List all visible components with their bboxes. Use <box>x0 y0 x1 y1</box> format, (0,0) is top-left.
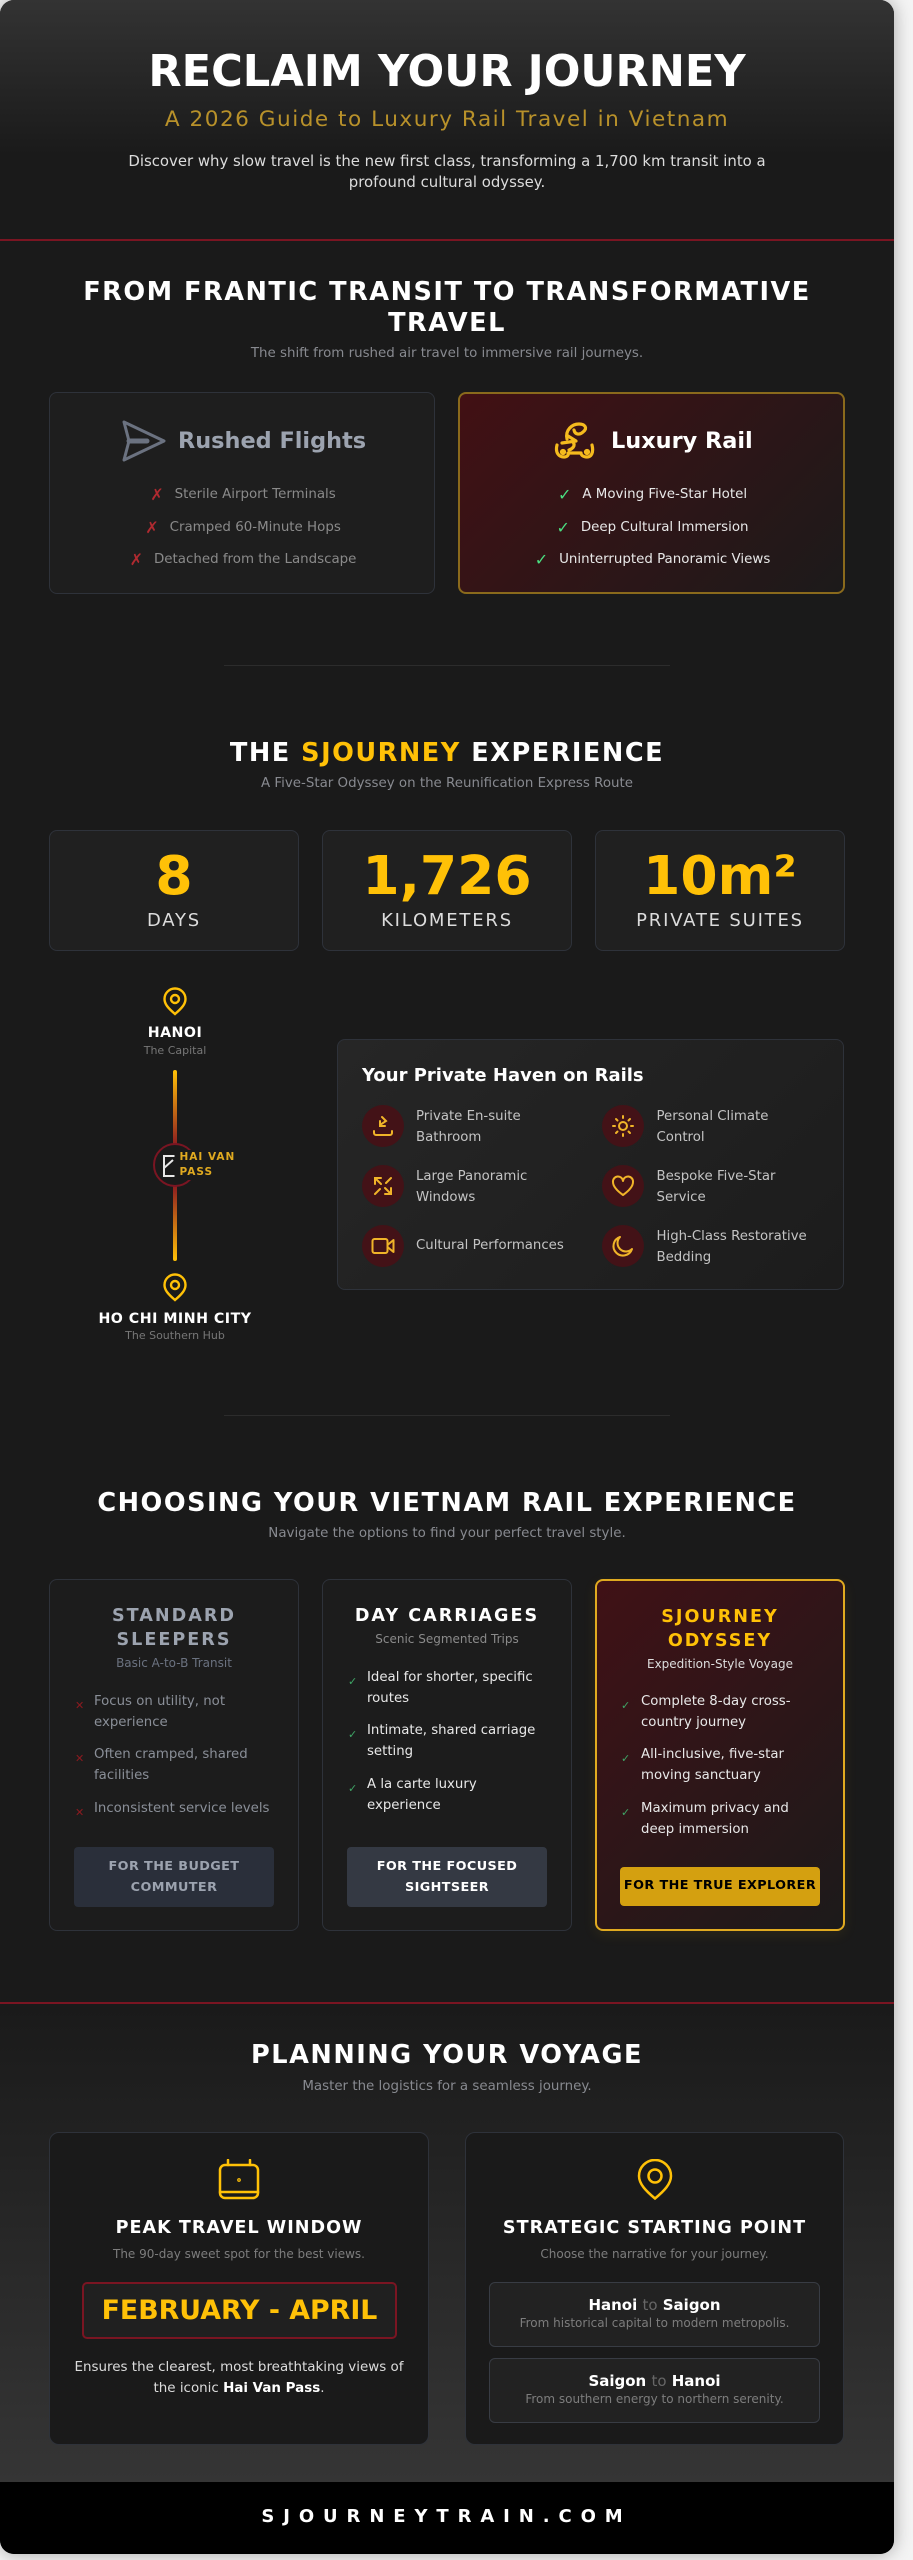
stat card: days <box>49 830 299 951</box>
list text: Ideal for shorter, specific <box>367 1670 533 1685</box>
list marker: ✓ <box>348 1782 357 1795</box>
list item <box>558 485 747 504</box>
amenity: bathroom <box>362 1105 521 1147</box>
stat card: kilometers <box>322 830 572 951</box>
list text <box>641 1694 791 1730</box>
amenity text <box>416 1169 527 1205</box>
list text: Focus on utility, not <box>94 1694 225 1709</box>
option title: STANDARD <box>112 1606 236 1626</box>
footer url: SJOURNEYTRAIN.COM <box>261 2506 632 2527</box>
icon: rail <box>554 422 594 459</box>
audience button <box>347 1847 547 1907</box>
list marker: ✕ <box>75 1752 84 1765</box>
list marker: ✕ <box>75 1806 84 1819</box>
sublabel: southern hub: The Southern Hub <box>125 1329 225 1342</box>
amenity text: Bedding <box>656 1250 711 1265</box>
amenity text: Cultural Performances <box>416 1238 564 1253</box>
card subtitle: Choose the narrative for your journey. <box>540 2247 769 2261</box>
route note: From southern energy to northern serenity. <box>525 2392 784 2406</box>
route title: Saigon to Hanoi <box>588 2372 721 2390</box>
amenity text: Bespoke Five-Star <box>656 1169 775 1184</box>
card title: STRATEGIC STARTING POINT <box>503 2218 806 2238</box>
amenity text: Windows <box>416 1190 475 1205</box>
sublabel: capital: The Capital <box>144 1044 206 1057</box>
route timeline <box>98 987 252 1342</box>
date range box: FEBRUARY - APRIL <box>102 2295 377 2326</box>
list text: Complete 8-day cross- <box>641 1694 791 1709</box>
list marker: ✕ <box>75 1699 84 1712</box>
subheading: choosing: Navigate the options to find your perfect travel style. <box>268 1526 626 1541</box>
description: the iconic Hai Van Pass. <box>154 2381 324 2396</box>
list item: Detached from the Landscape <box>154 552 356 567</box>
audience button: FOR THE FOCUSED <box>377 1859 517 1874</box>
list item: Cramped 60-Minute Hops <box>170 520 341 535</box>
list text: All-inclusive, five-star <box>641 1747 784 1762</box>
list text: country journey <box>641 1715 746 1730</box>
list item: A Moving Five-Star Hotel <box>582 487 747 502</box>
list item: ✓ <box>535 550 548 569</box>
description: Ensures the clearest, most breathtaking views of <box>75 2360 403 2375</box>
subheading: planning: Master the logistics for a seamless journey. <box>302 2079 592 2094</box>
route note: From historical capital to modern metropolis. <box>520 2316 789 2330</box>
route title: Hanoi to Saigon <box>588 2296 721 2314</box>
route option: saigon to hanoi <box>489 2358 820 2423</box>
subheading: experience: A Five-Star Odyssey on the Reunification Express Route <box>261 776 633 791</box>
audience button <box>74 1847 274 1907</box>
panel: private haven <box>337 1039 844 1290</box>
panel: peak travel window <box>49 2132 429 2445</box>
panel: rushed flights <box>49 392 435 594</box>
option subtitle: Expedition-Style Voyage <box>647 1657 793 1671</box>
amenity text: Control <box>656 1130 705 1145</box>
icon: plane <box>122 420 166 462</box>
number: 8 <box>155 844 193 907</box>
panel: day carriages <box>322 1579 572 1931</box>
list text <box>367 1670 533 1706</box>
list marker: ✓ <box>621 1699 630 1712</box>
list text <box>94 1747 248 1783</box>
list text: A la carte luxury <box>367 1777 477 1792</box>
icon: expand <box>362 1165 404 1207</box>
amenity text: High-Class Restorative <box>656 1229 807 1244</box>
heading: experience: THE SJOURNEY EXPERIENCE <box>230 738 664 768</box>
list text: Often cramped, shared <box>94 1747 248 1762</box>
amenity: bedding <box>602 1225 807 1267</box>
list item: ✓ <box>556 518 570 537</box>
hai van pass marker <box>153 1143 197 1187</box>
stat card: suites <box>595 830 845 951</box>
audience button: FOR THE TRUE EXPLORER <box>624 1878 816 1893</box>
amenity text: Private En-suite <box>416 1109 521 1124</box>
list text: experience <box>94 1715 168 1730</box>
panel: strategic starting point <box>465 2132 844 2445</box>
icon: heart <box>602 1165 644 1207</box>
amenity text: Service <box>656 1190 706 1205</box>
icon: calendar <box>218 2159 260 2200</box>
audience button: FOR THE BUDGET <box>109 1859 239 1874</box>
icon: video <box>362 1225 404 1267</box>
heading: choosing: CHOOSING YOUR VIETNAM RAIL EXPERIENCE <box>97 1488 797 1518</box>
icon: pin <box>638 2159 672 2200</box>
amenity text <box>656 1229 807 1265</box>
list item: ✓ <box>558 485 571 504</box>
amenity text <box>656 1169 776 1205</box>
list text: facilities <box>94 1768 149 1783</box>
amenity text: Bathroom <box>416 1130 481 1145</box>
intro text <box>128 152 766 191</box>
planning section background <box>0 2002 894 2482</box>
label: hai van pass: PASS <box>180 1166 213 1178</box>
heading: transit to travel <box>83 277 811 338</box>
label: DAYS <box>147 910 201 931</box>
label: KILOMETERS <box>381 910 513 931</box>
option subtitle: Basic A-to-B Transit <box>116 1656 232 1670</box>
list text <box>94 1694 225 1730</box>
option subtitle: Scenic Segmented Trips <box>375 1632 519 1646</box>
icon: sun <box>602 1105 644 1147</box>
list text: Maximum privacy and <box>641 1801 789 1816</box>
list text <box>641 1801 789 1837</box>
amenity: windows <box>362 1165 527 1207</box>
list item: ✗ <box>150 485 164 504</box>
card subtitle: The 90-day sweet spot for the best views. <box>113 2247 365 2261</box>
icon: pin hcmc <box>163 1273 187 1302</box>
option title: SLEEPERS <box>116 1630 232 1650</box>
option title: SJOURNEY <box>661 1607 779 1627</box>
panel: standard sleepers <box>49 1579 299 1931</box>
icon: moon <box>602 1225 644 1267</box>
list text: Intimate, shared carriage <box>367 1723 535 1738</box>
list text <box>641 1747 784 1783</box>
amenity text: Personal Climate <box>656 1109 768 1124</box>
label: PRIVATE SUITES <box>636 910 804 931</box>
intro text: Discover why slow travel is the new first class, transforming a 1,700 km transit into a <box>128 152 766 170</box>
label: hai van pass <box>180 1150 235 1180</box>
list text: experience <box>367 1798 441 1813</box>
icon: pin hanoi <box>163 987 187 1016</box>
amenity text <box>416 1109 521 1145</box>
heading: planning: PLANNING YOUR VOYAGE <box>251 2040 643 2070</box>
audience button: SIGHTSEER <box>405 1880 489 1895</box>
list item <box>556 518 749 537</box>
date range box <box>82 2282 397 2339</box>
route line <box>173 1070 177 1261</box>
card title: PEAK TRAVEL WINDOW <box>116 2218 362 2238</box>
amenity text <box>656 1109 768 1145</box>
list item <box>150 485 336 504</box>
option title <box>112 1606 236 1650</box>
amenity: performances <box>362 1225 564 1267</box>
heading: transit to travel: FROM FRANTIC TRANSIT TO TRANSFORMATIVE <box>83 277 811 307</box>
icon: bathroom <box>362 1105 404 1147</box>
icon: pass <box>163 1155 174 1177</box>
audience button: COMMUTER <box>131 1880 217 1895</box>
list text: setting <box>367 1744 413 1759</box>
route option: hanoi to saigon <box>489 2282 820 2347</box>
label: luxury rail: Luxury Rail <box>611 428 753 454</box>
list text <box>367 1723 535 1759</box>
list item: Deep Cultural Immersion <box>581 520 749 535</box>
title: RECLAIM YOUR JOURNEY <box>148 47 746 97</box>
panel: sjourney odyssey <box>595 1579 845 1931</box>
list text <box>367 1777 477 1813</box>
label: hcmc: HO CHI MINH CITY <box>98 1311 252 1327</box>
list text: moving sanctuary <box>641 1768 761 1783</box>
amenity text: Large Panoramic <box>416 1169 527 1184</box>
list item <box>145 518 341 537</box>
label: hanoi: HANOI <box>148 1025 202 1041</box>
list item: Uninterrupted Panoramic Views <box>559 552 770 567</box>
list item: ✗ <box>130 550 143 569</box>
list text: routes <box>367 1691 409 1706</box>
option title <box>661 1607 779 1651</box>
list marker: ✓ <box>348 1728 357 1741</box>
number: 10m² <box>643 844 797 907</box>
list item: ✗ <box>145 518 159 537</box>
option title: ODYSSEY <box>668 1631 772 1651</box>
header panel <box>0 0 894 241</box>
audience button <box>620 1867 820 1906</box>
panel: luxury rail <box>458 392 845 594</box>
subtitle: A 2026 Guide to Luxury Rail Travel in Vietnam <box>165 107 729 132</box>
list marker: ✓ <box>621 1806 630 1819</box>
amenity: climate <box>602 1105 768 1147</box>
label: hai van pass: HAI VAN <box>180 1151 235 1163</box>
number: 1,726 <box>362 844 532 907</box>
subheading: transit to travel: The shift from rushed air travel to immersive rail journeys. <box>251 346 643 361</box>
heading: transit to travel: TRAVEL <box>388 308 506 338</box>
list marker: ✓ <box>348 1675 357 1688</box>
list marker: ✓ <box>621 1752 630 1765</box>
list text: Inconsistent service levels <box>94 1801 269 1816</box>
description <box>75 2360 404 2396</box>
option title: DAY CARRIAGES <box>355 1606 539 1626</box>
panel heading: Your Private Haven on Rails <box>362 1065 644 1086</box>
list item: Sterile Airport Terminals <box>175 487 336 502</box>
label: rushed flights: Rushed Flights <box>178 428 366 454</box>
amenity: service <box>602 1165 776 1207</box>
list text: deep immersion <box>641 1822 749 1837</box>
footer <box>0 2482 894 2554</box>
intro text: profound cultural odyssey. <box>349 173 545 191</box>
